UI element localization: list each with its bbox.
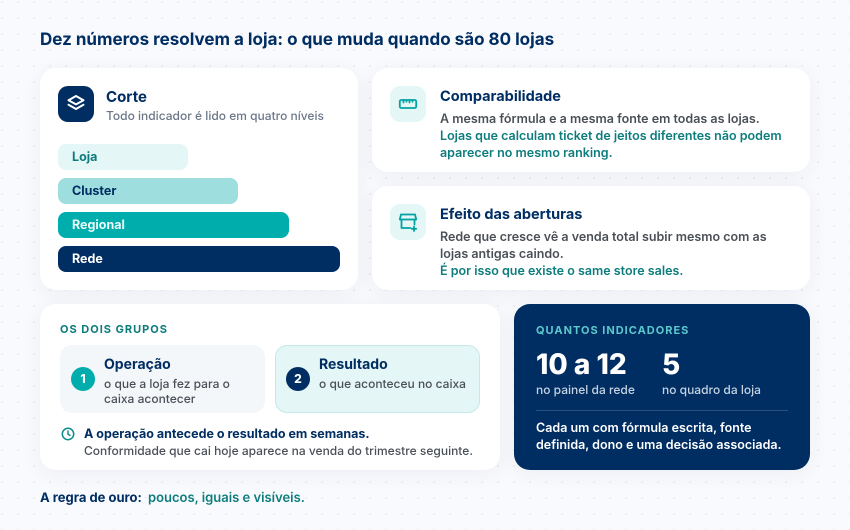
bar: regional xyxy=(58,212,289,238)
efeito text: É por isso que existe o same store sales. xyxy=(440,264,683,279)
box: operação xyxy=(60,345,265,413)
comparabilidade text: aparecer no mesmo ranking. xyxy=(440,146,613,161)
comparabilidade text: A mesma fórmula e a mesma fonte em todas as lojas. xyxy=(440,112,760,127)
quantos text: Cada um com fórmula escrita, fonte xyxy=(536,421,752,436)
operação text xyxy=(104,376,230,406)
nota: operação antecede xyxy=(84,427,473,458)
bar: regional: Regional xyxy=(72,218,125,233)
panel: corte xyxy=(40,68,358,290)
panel: quantos indicadores xyxy=(514,304,810,470)
stat: 10 a 12 label: no painel da rede xyxy=(536,382,635,397)
bar: rede xyxy=(58,246,340,272)
badge 1: 1 xyxy=(80,371,86,386)
quantos text xyxy=(536,421,782,453)
operação heading: Operação xyxy=(104,356,171,373)
operação text: o que a loja fez para o xyxy=(104,376,230,391)
operação text: caixa acontecer xyxy=(104,391,195,406)
bar: loja: Loja xyxy=(72,150,97,165)
regra de ouro: A regra de ouro: poucos, iguais e visíveis. xyxy=(40,490,305,506)
efeito heading: Efeito das aberturas xyxy=(440,206,582,223)
comparabilidade text xyxy=(440,112,782,161)
corte heading: Corte xyxy=(106,87,147,106)
corte subtitle: Todo indicador é lido em quatro níveis xyxy=(106,108,324,123)
comparabilidade text: Lojas que calculam ticket de jeitos diferentes não podem xyxy=(440,129,782,144)
badge 1 xyxy=(71,367,95,391)
icon: store plus xyxy=(390,204,426,240)
badge 2 xyxy=(286,367,310,391)
stat: 5: 5 xyxy=(662,347,680,381)
resultado heading: Resultado xyxy=(319,356,388,373)
quantos label: QUANTOS INDICADORES xyxy=(536,323,689,337)
bar: cluster xyxy=(58,178,238,204)
bar: loja xyxy=(58,144,188,170)
badge 2: 2 xyxy=(294,371,302,386)
panel: comparabilidade xyxy=(372,68,810,172)
quantos text: definida, dono e uma decisão associada. xyxy=(536,438,782,453)
bar: cluster: Cluster xyxy=(72,184,116,199)
box: resultado xyxy=(275,345,480,413)
nota: operação antecede: A operação antecede o resultado em semanas. xyxy=(84,427,370,442)
title: Dez números resolvem a loja: o que muda quando são 80 lojas xyxy=(40,30,554,50)
panel: efeito das aberturas xyxy=(372,186,810,290)
panel: os dois grupos xyxy=(40,304,500,470)
icon: layers xyxy=(58,86,94,122)
icon: ruler xyxy=(390,86,426,122)
icon: clock xyxy=(62,428,74,440)
stat: 5 label: no quadro da loja xyxy=(662,382,761,397)
stat: 10 a 12: 10 a 12 xyxy=(536,347,627,381)
efeito text: Rede que cresce vê a venda total subir mesmo com as xyxy=(440,230,767,245)
comparabilidade heading: Comparabilidade xyxy=(440,88,561,105)
efeito text xyxy=(440,230,767,279)
nota: operação antecede: Conformidade que cai hoje aparece na venda do trimestre seguinte. xyxy=(84,443,473,458)
efeito text: lojas antigas caindo. xyxy=(440,247,564,262)
dois grupos label: OS DOIS GRUPOS xyxy=(60,322,168,336)
bar: rede: Rede xyxy=(72,252,103,267)
resultado text: o que aconteceu no caixa xyxy=(319,376,466,391)
